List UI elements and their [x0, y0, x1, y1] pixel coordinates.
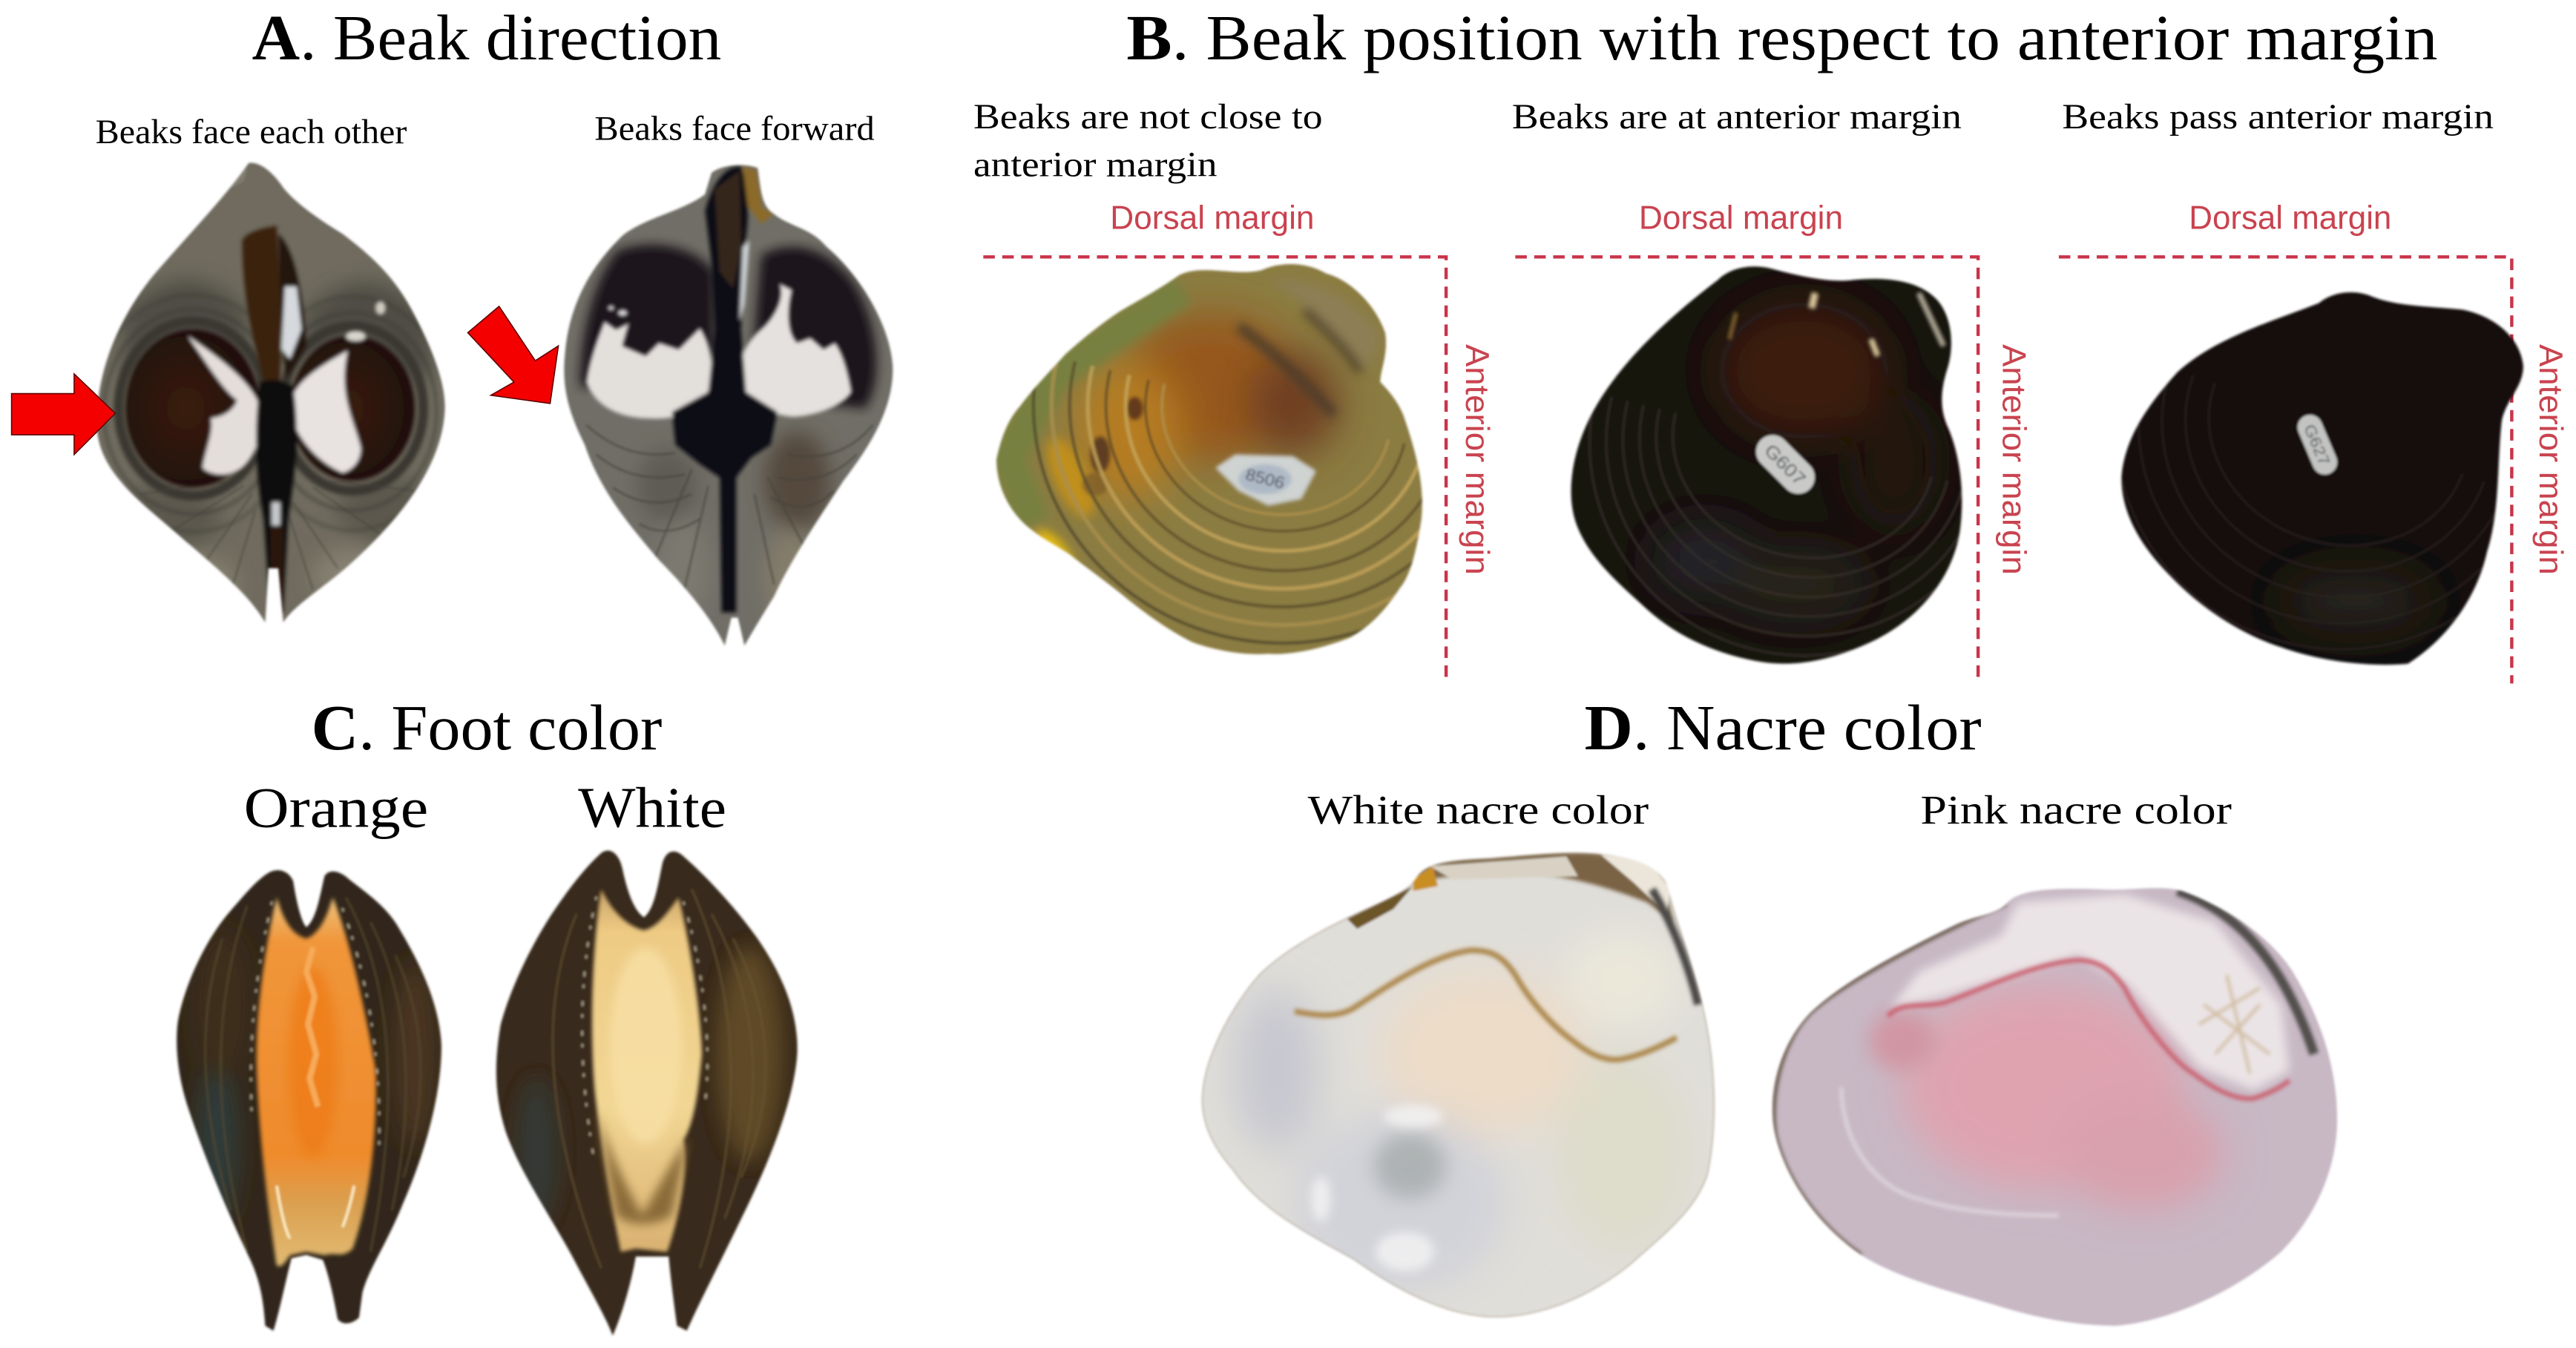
- margin annotation: anterior margin, first shell: Anterior margin: [1459, 344, 1495, 575]
- heading: A. Beak direction: A. Beak direction: [252, 2, 721, 73]
- label: beaks are not close to anterior margin: Beaks are not close to: [973, 97, 1323, 137]
- label: beaks face forward: Beaks face forward: [594, 110, 875, 148]
- arrow: red pointer to beak, left shell: [12, 374, 115, 455]
- label: orange: Orange: [244, 775, 428, 839]
- shell tag: third shell: G627: [2300, 422, 2333, 468]
- heading: B. Beak position: B. Beak position with respect to anterior margin: [1126, 2, 2438, 73]
- heading: C. Foot color: C. Foot color: [312, 692, 663, 763]
- shell photo: beaks at margin: [1568, 264, 1964, 666]
- margin guide: first shell: [983, 257, 1446, 683]
- panel A: beak direction: [12, 2, 914, 659]
- shell photo: orange foot: [165, 864, 453, 1342]
- shell photo: white nacre: [1194, 848, 1721, 1326]
- shell photo: beaks face forward: [562, 163, 895, 646]
- heading: D. Nacre color: D. Nacre color: [1585, 692, 1982, 763]
- shell photo: beaks face each other: [96, 161, 447, 623]
- margin annotation: anterior margin, second shell: Anterior margin: [1995, 344, 2031, 575]
- label: beaks pass anterior margin: Beaks pass anterior margin: [2062, 97, 2494, 137]
- shell tag: second shell: [1754, 433, 1818, 496]
- shell tag: first shell: [1215, 455, 1316, 506]
- margin annotation: dorsal margin, second shell: Dorsal margin: [1639, 200, 1843, 237]
- panel B: beak position with respect to anterior margin: [973, 2, 2569, 712]
- label: beaks are not close to anterior margin: anterior margin: [973, 145, 1218, 185]
- shell photo: pink nacre: [1762, 873, 2347, 1334]
- margin guide: third shell: [2059, 257, 2511, 683]
- label: white nacre color: White nacre color: [1308, 788, 1649, 833]
- margin guide: second shell: [1515, 257, 1978, 683]
- label: white: White: [578, 775, 726, 839]
- shell tag: first shell: 8506: [1243, 465, 1287, 493]
- shell photo: beaks pass margin: [2119, 290, 2526, 667]
- arrow: red pointer to beak, right shell: [467, 306, 559, 404]
- label: beaks are at anterior margin: Beaks are at anterior margin: [1512, 97, 1962, 137]
- shell tag: second shell: G607: [1760, 441, 1810, 490]
- shell photo: beaks not close to margin: [994, 262, 1425, 656]
- shell tag: third shell: [2294, 411, 2341, 479]
- label: pink nacre color: Pink nacre color: [1920, 788, 2232, 833]
- panel D: nacre color: [1194, 692, 2347, 1334]
- margin annotation: dorsal margin, first shell: Dorsal margin: [1110, 200, 1315, 237]
- shell photo: white foot: [486, 840, 807, 1342]
- panel C: foot color: [165, 692, 807, 1342]
- margin annotation: dorsal margin, third shell: Dorsal margin: [2189, 200, 2391, 237]
- margin annotation: anterior margin, third shell: Anterior margin: [2532, 344, 2569, 575]
- label: beaks face each other: Beaks face each other: [96, 113, 407, 151]
